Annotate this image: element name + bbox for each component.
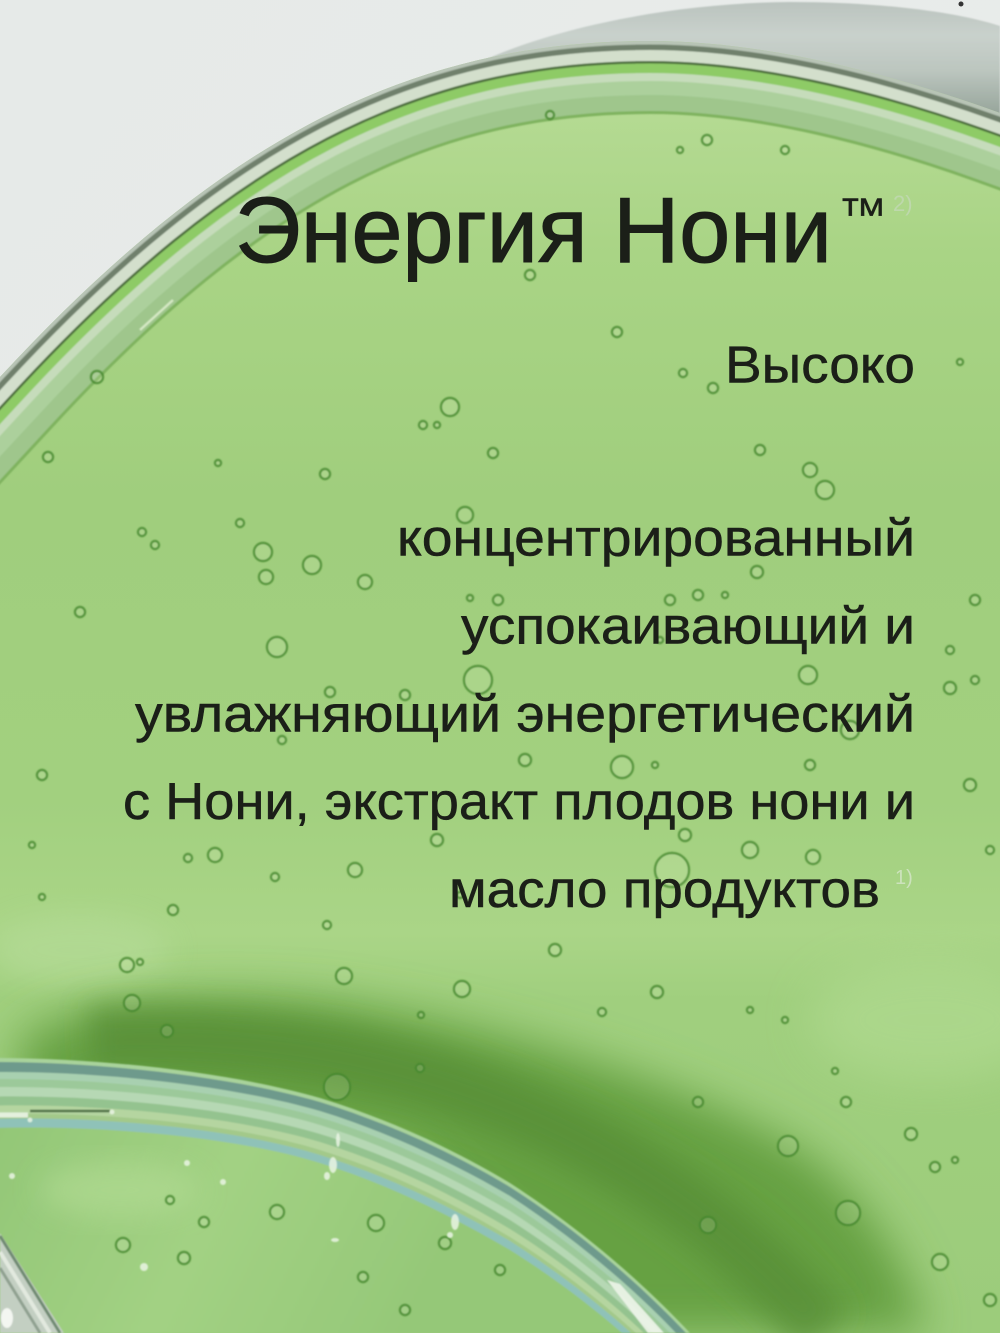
description text: успокаивающий и: [461, 598, 915, 656]
description text: с Нони, экстракт плодов нони и: [123, 773, 915, 831]
faint footnote 2: 2): [893, 191, 913, 216]
light patches in lower dish: [40, 1162, 200, 1218]
dish edge in bottom left corner: [0, 1233, 64, 1333]
faint footnote 1: 1): [895, 867, 913, 889]
title: Энергия Нони: [235, 178, 832, 282]
lower petri dish: [0, 1058, 690, 1333]
description text: концентрированный: [397, 510, 915, 568]
black speck on background: [958, 2, 964, 6]
white glints on lower dish rim: [9, 1110, 459, 1271]
dish lid behind: [480, 2, 1000, 140]
trademark mark: ™: [838, 188, 887, 240]
description text: Высоко: [725, 336, 915, 394]
description text: [123, 336, 915, 919]
description text: масло продуктов: [449, 861, 880, 919]
description text: увлажняющий энергетический: [135, 686, 915, 744]
